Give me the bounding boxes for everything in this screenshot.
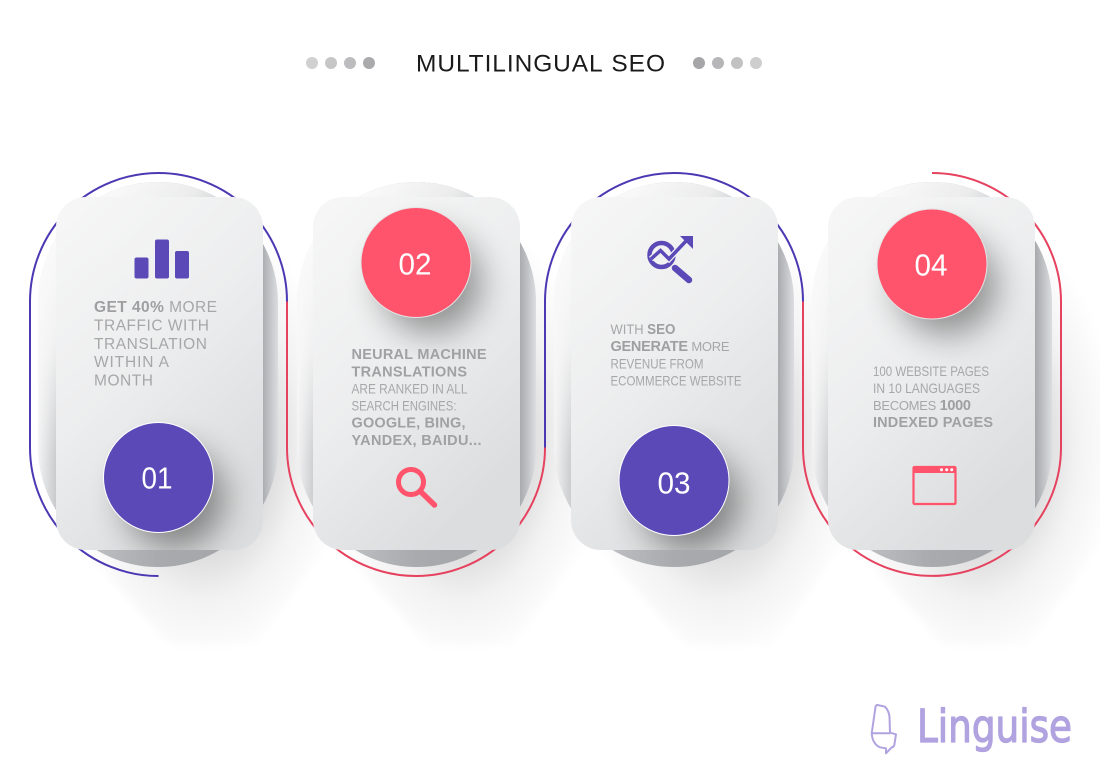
text: indexed pages: IN 10 LANGUAGES bbox=[873, 380, 980, 396]
icon: bar chart bbox=[134, 240, 189, 278]
text: neural machine translations: ARE RANKED IN ALL bbox=[352, 380, 468, 396]
text: neural machine translations: GOOGLE, BING, bbox=[352, 416, 466, 432]
logo icon bbox=[872, 705, 896, 753]
text: traffic: MONTH bbox=[94, 372, 153, 390]
badge 01: 01 bbox=[142, 460, 172, 496]
text: traffic: TRAFFIC WITH bbox=[94, 318, 209, 334]
decorative dots right bbox=[693, 57, 762, 69]
logo wordmark: Linguise bbox=[917, 700, 1072, 753]
ring: purple bbox=[30, 173, 287, 576]
decorative dots left bbox=[306, 57, 375, 69]
badge 02: 02 bbox=[398, 246, 432, 282]
text: traffic: TRANSLATION bbox=[94, 336, 207, 353]
badge 03 bbox=[619, 426, 729, 536]
circle shadow bbox=[897, 235, 997, 335]
text: SEO revenue: ECOMMERCE WEBSITE bbox=[610, 372, 742, 388]
circle shadow bbox=[381, 233, 481, 333]
panel: step 03 bbox=[545, 173, 803, 567]
icon: magnifier bbox=[398, 470, 434, 505]
text: neural machine translations bbox=[352, 347, 487, 449]
text: SEO revenue: WITH SEO bbox=[610, 321, 675, 338]
text: SEO revenue: GENERATE MORE bbox=[610, 338, 730, 355]
icon: chart magnifier bbox=[650, 236, 693, 280]
panel: step 04 bbox=[803, 173, 1061, 576]
text: neural machine translations: SEARCH ENGINES: bbox=[352, 398, 456, 414]
logo: Linguise bbox=[872, 700, 1072, 753]
text: indexed pages: BECOMES 1000 bbox=[873, 397, 971, 414]
title group bbox=[306, 50, 762, 78]
title: MULTILINGUAL SEO bbox=[416, 50, 665, 78]
ring: red bbox=[803, 173, 1061, 576]
text: traffic: WITHIN A bbox=[94, 354, 170, 371]
text: indexed pages: INDEXED PAGES bbox=[873, 415, 993, 431]
long cast shadows bbox=[75, 195, 1100, 645]
icon: browser window bbox=[913, 466, 956, 504]
text: indexed pages: 100 WEBSITE PAGES bbox=[873, 363, 989, 379]
ring: purple bbox=[545, 173, 803, 448]
text: traffic: GET 40% MORE bbox=[94, 299, 217, 316]
text: neural machine translations: YANDEX, BAIDU... bbox=[352, 433, 482, 449]
text: SEO revenue: REVENUE FROM bbox=[610, 356, 704, 372]
text: neural machine translations: NEURAL MACHINE bbox=[352, 347, 487, 363]
badge 04: 04 bbox=[914, 248, 948, 282]
badge 01 bbox=[104, 422, 214, 532]
circle shadow bbox=[640, 451, 740, 551]
panel: step 01 bbox=[30, 173, 287, 576]
text: indexed pages bbox=[873, 363, 993, 431]
text: SEO revenue bbox=[610, 321, 742, 388]
panel: step 02 bbox=[287, 182, 545, 576]
ring: red bbox=[287, 302, 545, 576]
badge 02 bbox=[361, 208, 471, 318]
circle shadow bbox=[124, 448, 224, 548]
badge 04 bbox=[877, 209, 987, 319]
text: neural machine translations: TRANSLATIONS bbox=[352, 364, 467, 380]
badge 03: 03 bbox=[658, 466, 690, 500]
text: traffic bbox=[94, 299, 217, 390]
